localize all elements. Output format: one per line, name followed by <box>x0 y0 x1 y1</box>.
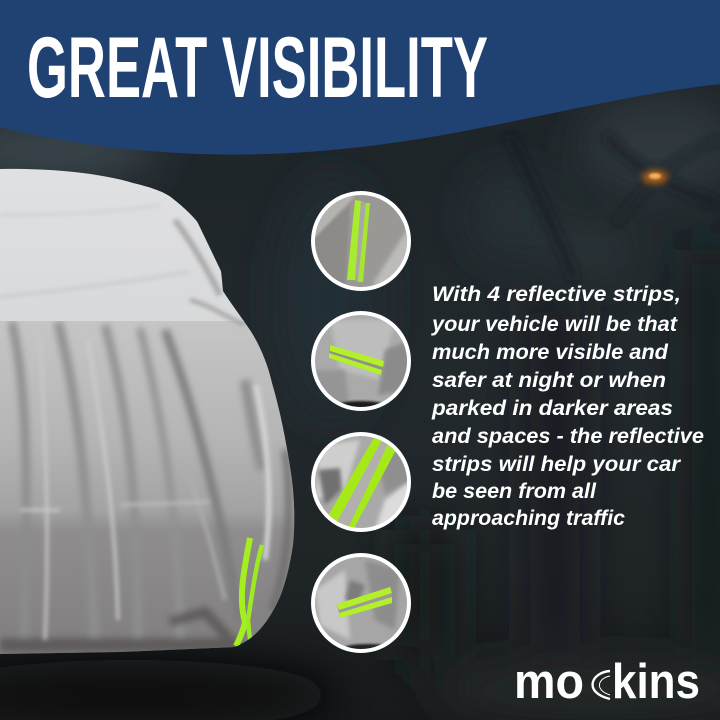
covered car <box>0 165 300 660</box>
body text: safer at night or when <box>432 369 666 392</box>
body text <box>431 283 704 530</box>
car cover: upper hood <box>0 165 245 321</box>
icon: crescent moon <box>593 671 610 699</box>
circle detail 4 <box>310 553 412 655</box>
circle detail 3 <box>310 430 412 532</box>
body text: parked in darker areas <box>431 397 673 420</box>
header banner <box>0 0 720 155</box>
body text: With 4 reflective strips, <box>432 283 681 306</box>
body text: much more visible and <box>432 341 669 364</box>
body text: your vehicle will be that <box>431 313 678 336</box>
circle detail 2 <box>310 310 412 412</box>
car cover: soft folds <box>0 322 289 645</box>
circle detail 1 <box>310 190 412 292</box>
logo: mockins: mo <box>514 655 584 709</box>
icon: orange lamp glow <box>642 170 668 184</box>
body text: approaching traffic <box>432 507 625 530</box>
logo: mockins <box>514 655 700 709</box>
body text: strips will help your car <box>432 453 682 476</box>
body text: and spaces - the reflective <box>432 425 704 448</box>
reflective strip on car <box>236 538 262 646</box>
body text: be seen from all <box>432 480 597 503</box>
logo: mockins: kins <box>612 655 700 709</box>
strips <box>347 200 361 280</box>
